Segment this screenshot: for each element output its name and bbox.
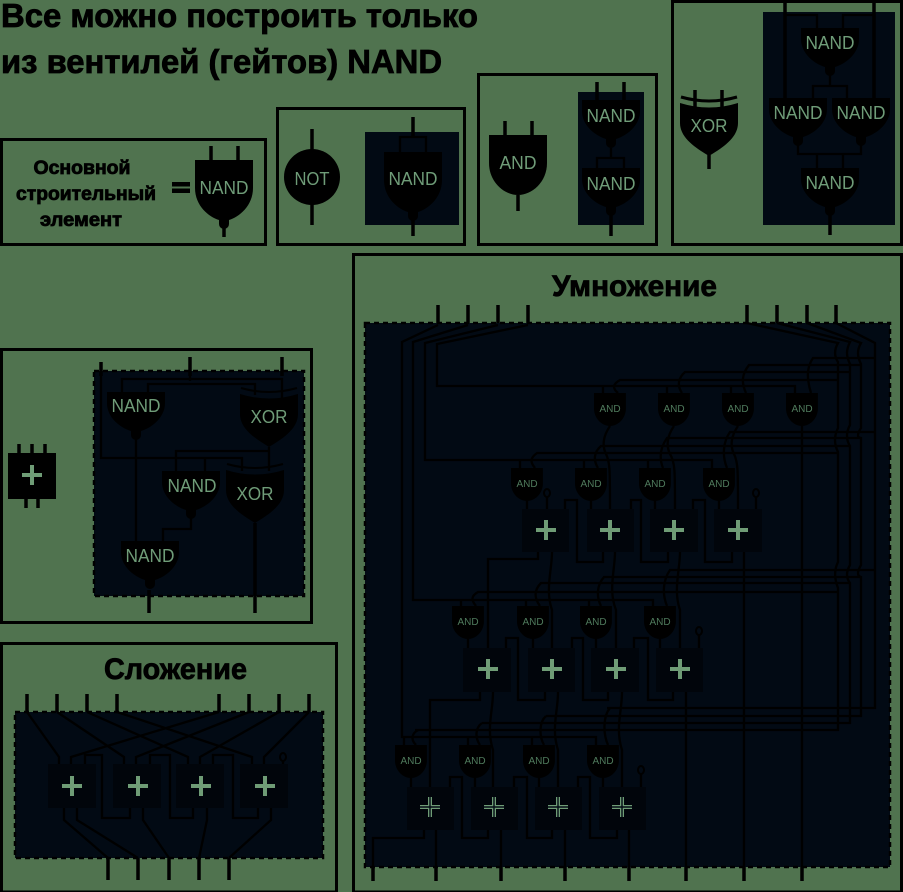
icon: adder block	[8, 444, 56, 508]
multiplication circuit	[365, 305, 890, 881]
caption: basic building block: Основной	[34, 158, 130, 179]
AND gates row 4	[395, 745, 619, 778]
caption: basic building block	[16, 158, 156, 231]
gate to adder wires	[411, 426, 802, 867]
XOR circuit: NAND	[836, 103, 886, 123]
panel: addition	[2, 644, 336, 892]
icon: NOT gate: NOT	[294, 169, 330, 189]
AND gates row 4: AND	[400, 756, 422, 767]
panel frame	[2, 350, 312, 622]
AND circuit: NAND	[586, 174, 636, 194]
panel frame	[2, 140, 266, 244]
AND gates row 3: AND	[522, 617, 544, 628]
addition circuit	[15, 694, 323, 880]
row branches	[412, 358, 875, 745]
AND gates row 3	[452, 606, 676, 639]
heading: multiplication: Умножение	[552, 270, 717, 303]
AND gates row 2	[511, 468, 735, 501]
panel frame	[672, 2, 902, 244]
icon: NAND gate	[195, 146, 253, 237]
AND gates row 2: AND	[516, 479, 538, 490]
adder circuit: XOR	[250, 407, 288, 427]
AND gates row 1: AND	[727, 404, 749, 415]
AND gates row 2: AND	[580, 479, 602, 490]
AND gates row 1: AND	[663, 404, 685, 415]
AND gates row 4: AND	[528, 756, 550, 767]
adders row 3	[463, 648, 703, 692]
AND gates row 4: AND	[464, 756, 486, 767]
constant zero inputs	[544, 489, 759, 787]
panel frame	[354, 254, 902, 892]
left input buses	[402, 325, 795, 745]
XOR circuit: NAND	[806, 173, 854, 193]
AND circuit	[578, 82, 644, 236]
panel: XOR from NAND	[672, 0, 902, 244]
AND gates row 3: AND	[649, 617, 671, 628]
equals sign	[172, 182, 190, 193]
panel frame	[478, 74, 656, 244]
icon: XOR gate	[680, 90, 738, 169]
panel: multiplication	[354, 254, 902, 892]
adders row 2	[522, 509, 762, 552]
panel: NOT from NAND	[278, 108, 464, 244]
icon: XOR gate: XOR	[690, 116, 728, 136]
icon: AND gate	[489, 121, 547, 211]
adder circuit: NAND	[168, 476, 216, 496]
adder circuit: XOR	[236, 484, 274, 504]
title: из вентилей (гейтов) NAND	[1, 43, 442, 80]
adders row 4	[407, 787, 646, 830]
AND gates row 1: AND	[599, 404, 621, 415]
AND gates row 1	[594, 393, 818, 426]
caption: basic building block: строительный	[16, 184, 156, 205]
carry and sum wires	[488, 500, 744, 867]
adder circuit: NAND	[112, 396, 160, 416]
caption: basic building block: элемент	[40, 210, 122, 231]
heading: addition: Сложение	[104, 653, 247, 686]
panel: AND from NAND	[478, 74, 656, 244]
AND circuit: NAND	[586, 106, 636, 126]
icon: NAND gate: NAND	[200, 178, 248, 198]
input and output pins	[373, 305, 836, 881]
title	[1, 0, 478, 80]
panel frame	[2, 644, 336, 892]
NOT circuit: NAND	[388, 169, 438, 189]
AND gates row 3: AND	[457, 617, 479, 628]
constant zero input	[282, 760, 284, 764]
adder blocks	[48, 764, 288, 808]
XOR circuit: NAND	[806, 33, 854, 53]
panel frame	[278, 108, 464, 244]
adder circuit: NAND	[126, 546, 174, 566]
AND gates row 3: AND	[585, 617, 607, 628]
NOT circuit	[365, 117, 459, 236]
XOR circuit: NAND	[774, 103, 822, 123]
adder circuit	[94, 357, 304, 613]
right input buses	[415, 323, 875, 730]
icon: AND gate: AND	[500, 153, 536, 173]
XOR circuit	[763, 0, 895, 235]
AND gates row 2: AND	[708, 479, 730, 490]
AND gates row 1: AND	[791, 404, 813, 415]
panel: basic building block	[2, 140, 266, 244]
icon: NOT gate	[284, 129, 340, 225]
AND gates row 4: AND	[592, 756, 614, 767]
panel: full adder	[2, 350, 312, 622]
AND gates row 2: AND	[644, 479, 666, 490]
